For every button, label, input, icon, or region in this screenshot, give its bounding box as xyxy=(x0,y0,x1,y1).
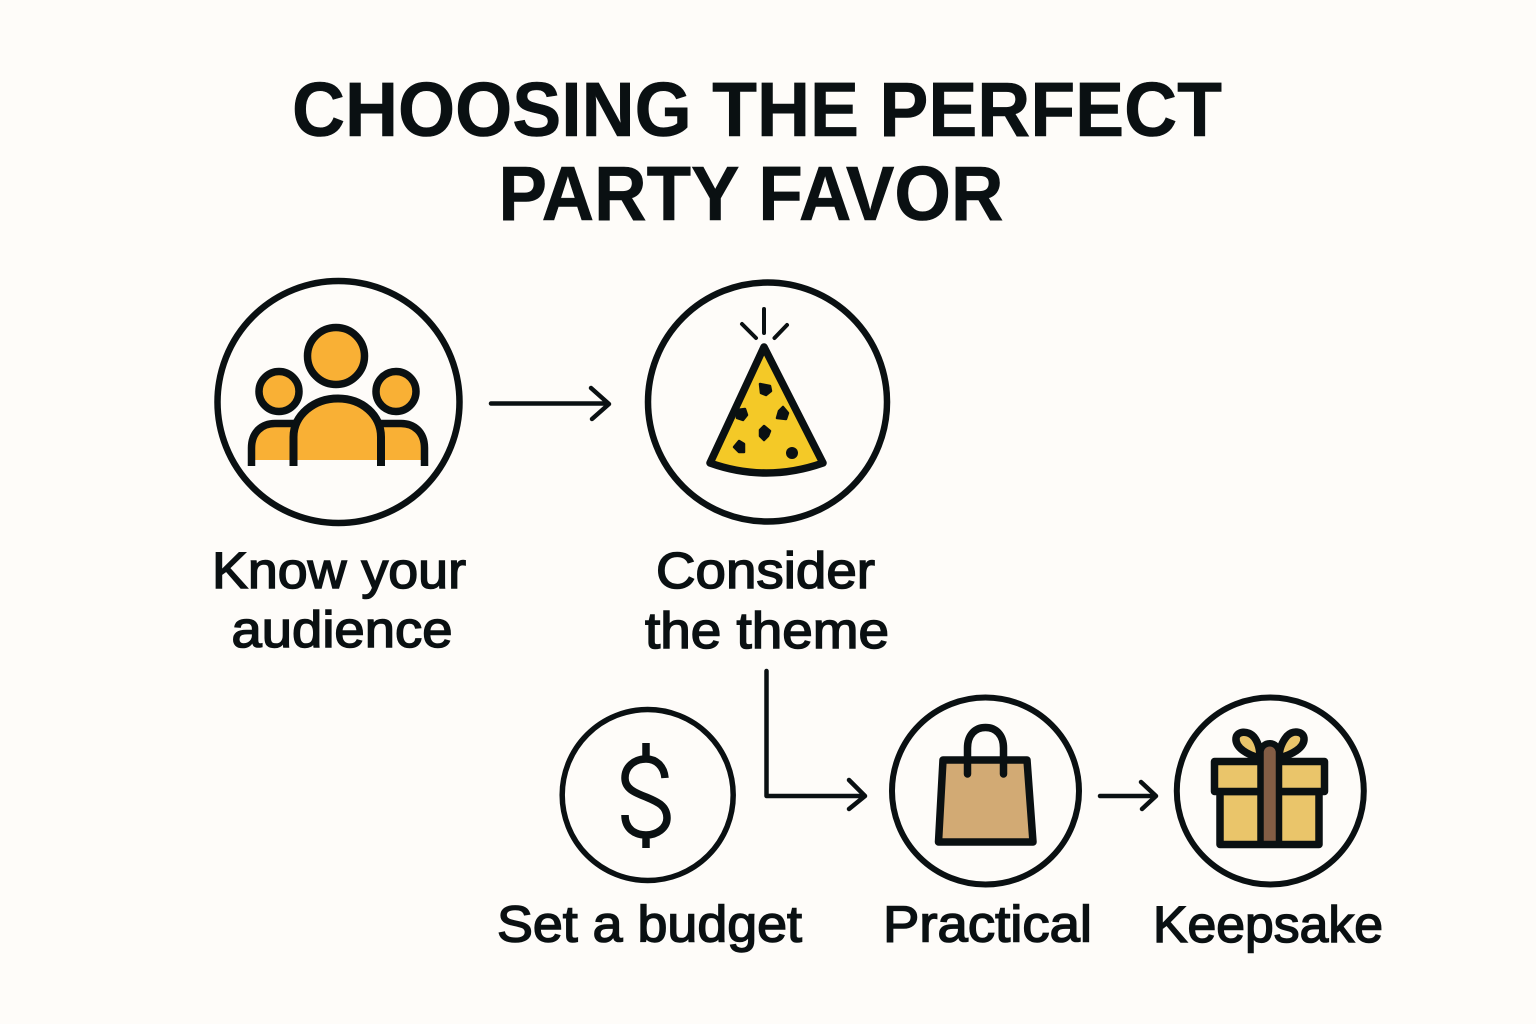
arrow: practical to keepsake xyxy=(1100,782,1156,809)
label: know your audience: audience xyxy=(232,601,452,658)
label: consider the theme: Consider xyxy=(656,542,875,599)
label: consider the theme xyxy=(645,542,889,659)
label: keepsake: Keepsake xyxy=(1153,896,1383,953)
step: keepsake xyxy=(1153,698,1383,953)
label: know your audience: Know your xyxy=(212,542,466,599)
label: practical: Practical xyxy=(883,896,1092,952)
title: CHOOSING THE PERFECT xyxy=(292,67,1222,153)
step: practical xyxy=(883,698,1092,952)
arrow: theme to practical xyxy=(766,671,865,809)
title: PARTY FAVOR xyxy=(498,151,1004,237)
step: know your audience xyxy=(212,281,466,658)
icon: shopping bag circle xyxy=(892,698,1079,884)
label: set a budget: Set a budget xyxy=(497,896,802,952)
icon: party hat circle xyxy=(648,282,887,522)
icon: audience circle xyxy=(218,281,460,523)
icon: dollar circle xyxy=(562,710,733,880)
label: consider the theme: the theme xyxy=(645,602,889,659)
label: know your audience xyxy=(212,542,466,658)
step: consider the theme xyxy=(645,282,889,659)
arrow: audience to theme xyxy=(491,388,609,419)
title xyxy=(292,67,1222,237)
icon: gift box circle xyxy=(1177,698,1364,884)
step: set a budget xyxy=(497,710,802,952)
